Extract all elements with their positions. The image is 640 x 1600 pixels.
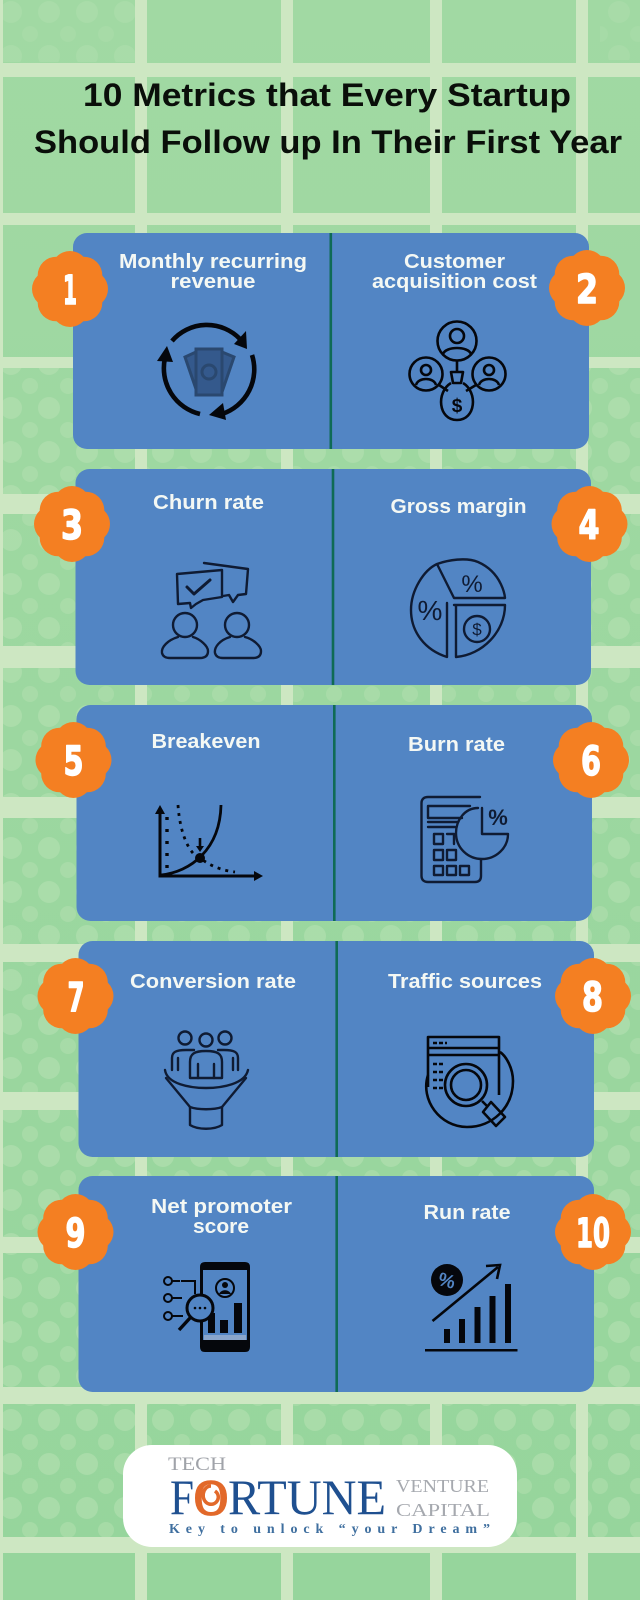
icon: run rate growth chart	[425, 1264, 518, 1352]
label: Run rate: Run rate	[424, 1202, 510, 1224]
badge 6: 6	[581, 739, 601, 785]
badge 3	[34, 486, 110, 562]
icon: breakeven chart	[155, 805, 263, 881]
label: Churn rate: Churn rate	[153, 492, 264, 514]
badge 8	[555, 958, 631, 1034]
title	[34, 77, 622, 160]
badge 1: 1	[63, 268, 77, 314]
logo: Tech Fortune Venture Capital: VENTURE	[396, 1476, 489, 1496]
icon: net promoter phone	[164, 1262, 250, 1352]
badge 2	[549, 250, 625, 326]
label: Gross margin: Gross margin	[390, 496, 526, 518]
logo: Tech Fortune Venture Capital: CAPITAL	[396, 1500, 490, 1520]
label: Monthly recurring revenue: revenue	[170, 271, 256, 293]
label: Conversion rate: Conversion rate	[130, 971, 296, 993]
logo: Tech Fortune Venture Capital: TECH	[168, 1454, 226, 1475]
badge 5	[35, 722, 112, 798]
label: Burn rate: Burn rate	[408, 734, 505, 756]
icon: two people with chat bubbles	[162, 563, 261, 658]
icon: calculator with pie	[422, 797, 508, 882]
badge 2: 2	[576, 267, 598, 313]
label: Net promoter score: score	[193, 1216, 249, 1238]
panel: row 4	[78, 941, 594, 1157]
icon: customer acquisition network: $	[452, 396, 463, 417]
label: Customer acquisition cost	[372, 251, 537, 293]
badge 7	[37, 958, 114, 1034]
logo: Tech Fortune Venture Capital: Key to unlock “your Dream”	[169, 1522, 490, 1537]
logo: Tech Fortune Venture Capital: RTUNE	[228, 1469, 386, 1525]
label: Net promoter score: Net promoter	[151, 1196, 292, 1218]
icon: gross margin pie: %	[418, 595, 442, 626]
logo: Tech Fortune Venture Capital	[123, 1445, 517, 1547]
badge 4	[551, 486, 628, 562]
logo: Tech Fortune Venture Capital: F	[170, 1469, 194, 1525]
badge 1	[32, 251, 108, 327]
icon: traffic sources magnifier	[426, 1037, 513, 1127]
panel: row 2	[76, 469, 591, 685]
label: Breakeven: Breakeven	[152, 731, 260, 753]
icon: calculator with pie: %	[488, 805, 508, 830]
title: Should Follow up In Their First Year	[34, 124, 622, 160]
badge 3: 3	[61, 503, 83, 549]
badge 10	[555, 1194, 631, 1270]
title: 10 Metrics that Every Startup	[83, 77, 571, 113]
icon: gross margin pie	[411, 559, 505, 657]
badge 6	[553, 722, 629, 798]
logo: Tech Fortune Venture Capital: O	[194, 1469, 228, 1525]
badge 8: 8	[582, 975, 603, 1021]
label: Traffic sources: Traffic sources	[388, 971, 542, 993]
icon: run rate growth chart: %	[436, 1269, 458, 1294]
label: Customer acquisition cost: acquisition cost	[372, 271, 537, 293]
icon: customer acquisition network	[410, 322, 506, 420]
label: Monthly recurring revenue: Monthly recurring	[119, 251, 307, 273]
badge 7: 7	[68, 975, 84, 1021]
panel: row 3	[76, 705, 592, 921]
icon: recurring money cycle	[157, 325, 254, 420]
badge 4: 4	[578, 503, 600, 549]
panel: row 5	[78, 1176, 594, 1392]
label: Customer acquisition cost: Customer	[404, 251, 505, 273]
icon: people funnel	[165, 1032, 248, 1129]
badge 5: 5	[64, 739, 84, 785]
badge 9: 9	[66, 1211, 86, 1257]
icon: gross margin pie: $	[472, 620, 482, 639]
icon: gross margin pie: %	[461, 571, 483, 598]
panel: row 1	[73, 233, 589, 449]
label: Net promoter score	[151, 1196, 292, 1238]
badge 9	[37, 1194, 114, 1270]
badge 10: 10	[576, 1211, 610, 1257]
label: Monthly recurring revenue	[119, 251, 307, 293]
